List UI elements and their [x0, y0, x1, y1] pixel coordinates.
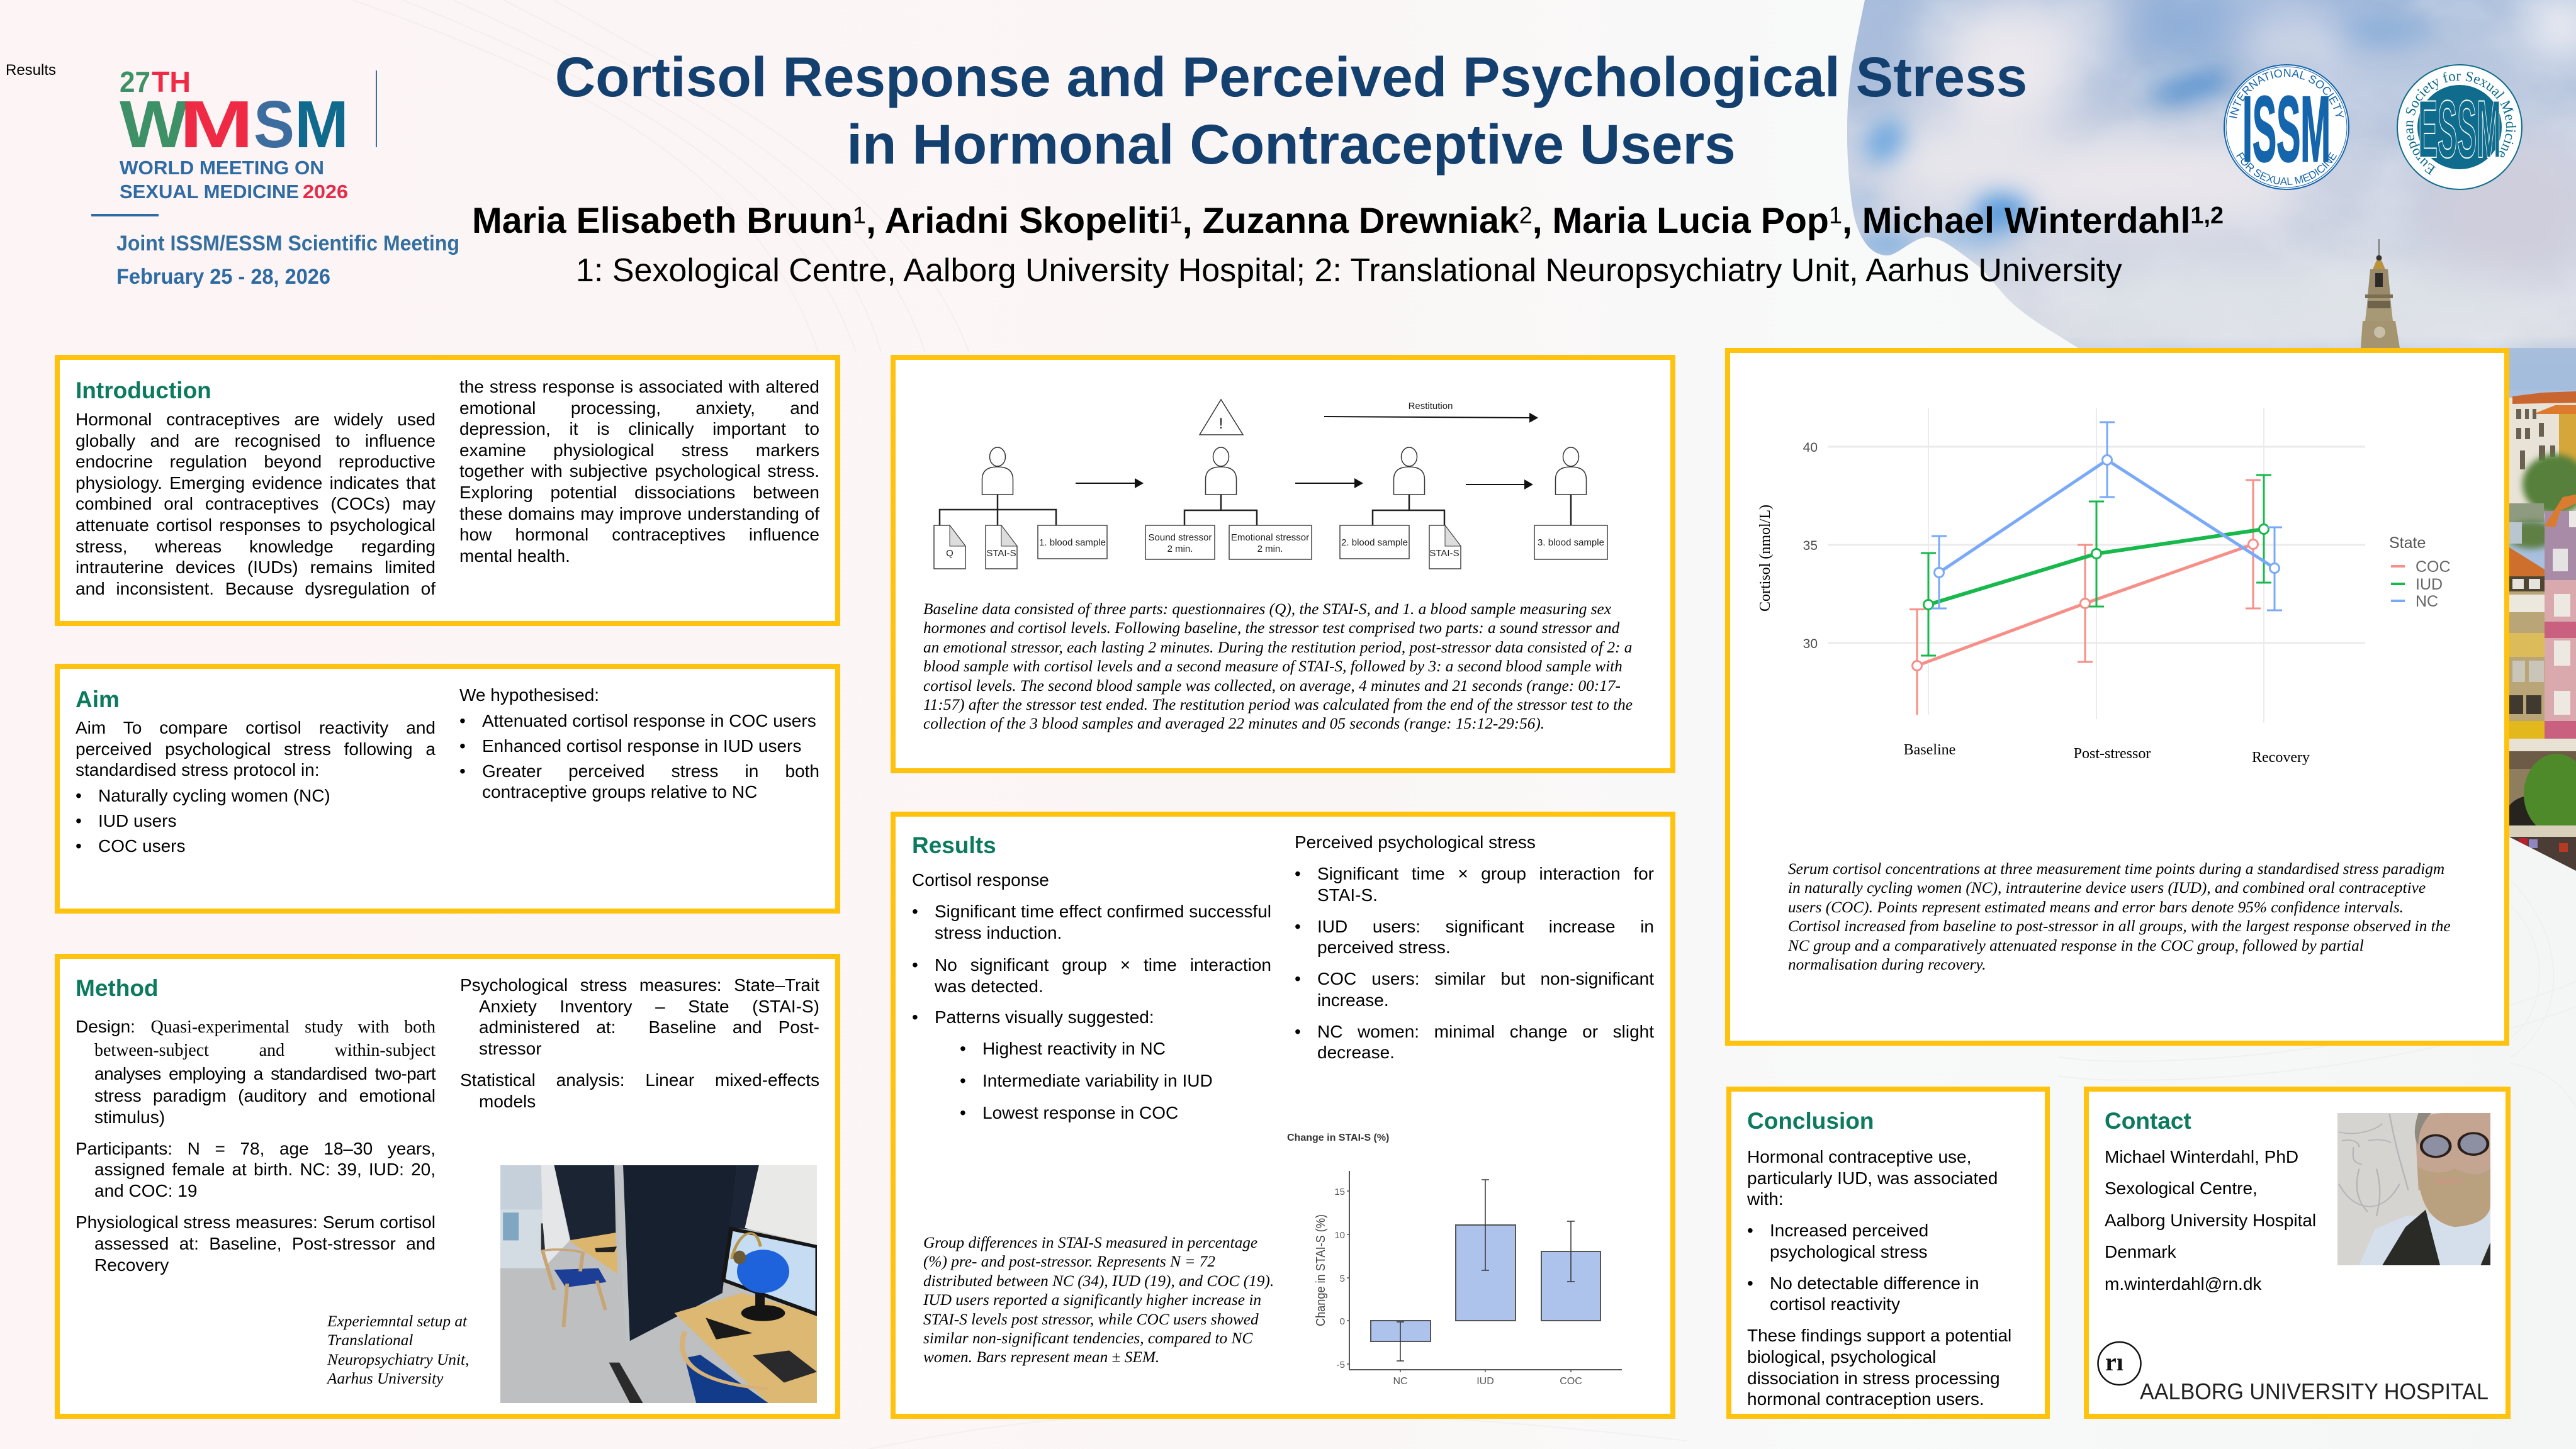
text: conclusion: hormonal contraception users.: [1747, 1389, 1984, 1409]
heading: introduction: Introduction: [76, 378, 211, 403]
text: contact details: Denmark: [2105, 1242, 2176, 1262]
photo: portrait of Michael Winterdahl: [2337, 1113, 2490, 1265]
caption: STAI-S bar chart: STAI-S levels post stressor, while COC users showed: [923, 1311, 1259, 1328]
text: conclusion: Increased perceived: [1770, 1221, 1928, 1240]
text: perceived stress findings: STAI-S.: [1317, 885, 1378, 905]
caption: study design: an emotional stressor, each lasting 2 minutes. During the restitution period, post-stressor data consisted of 2: a: [923, 639, 1632, 656]
text: introduction left column: and inconsistent. Because dysregulation of: [76, 579, 436, 598]
diagram: stress paradigm timeline: 1. blood sample: [1039, 537, 1106, 548]
line chart: cortisol across time points: Post-stressor: [2074, 746, 2151, 762]
text: aim left column: perceived psychological stress following a: [76, 739, 436, 759]
text: introduction right column: these domains may improve understanding of: [459, 504, 819, 523]
text: conclusion: particularly IUD, was associated: [1747, 1168, 1998, 1188]
text: contact details: Aalborg University Hospital: [2105, 1211, 2316, 1230]
text: aim left column: •: [76, 811, 82, 831]
text: introduction right column: the stress response is associated with altered: [459, 377, 819, 396]
bar chart: change in STAI-S: 15: [1334, 1187, 1345, 1197]
text: method left column: assessed at: Baseline, Post-stressor and: [94, 1234, 436, 1253]
text: contact details: Michael Winterdahl, PhD: [2105, 1147, 2298, 1166]
line chart: cortisol across time points: Baseline: [1904, 742, 1955, 758]
text: aim left column: COC users: [98, 836, 185, 856]
text: method left column: Recovery: [94, 1255, 169, 1275]
text: perceived stress findings: •: [1295, 1022, 1301, 1041]
text: cortisol response findings: Significant time effect confirmed successful: [935, 902, 1271, 921]
caption: cortisol chart: users (COC). Points represent estimated means and error bars denote 95% confidence intervals.: [1788, 898, 2404, 916]
conference logo: 27th WMSM: W: [120, 87, 188, 162]
diagram: stress paradigm timeline: STAI-S: [1429, 548, 1460, 559]
caption: experimental setup: [326, 1312, 469, 1387]
logo: ISSM: [2224, 64, 2523, 190]
panel: aim: [55, 664, 840, 914]
text: contact details: m.winterdahl@rn.dk: [2105, 1274, 2261, 1294]
text: method left column: analyses employing a standardised two-part: [94, 1064, 436, 1083]
bar chart: change in STAI-S: Change in STAI-S (%): [1314, 1214, 1328, 1326]
diagram: stress paradigm timeline: 3. blood sample: [1538, 537, 1604, 548]
series: IUD: [1921, 475, 2271, 656]
text: introduction left column: endocrine regulation beyond reproductive: [76, 452, 436, 471]
text: contact details: [2105, 1141, 2325, 1300]
text: contact details: Sexological Centre,: [2105, 1178, 2258, 1198]
conference logo: 27th WMSM: Joint ISSM/ESSM Scientific Meeting: [116, 232, 459, 255]
text: method right column: [460, 975, 819, 1111]
text: hypotheses: Enhanced cortisol response in IUD users: [482, 736, 801, 756]
text: conclusion: with:: [1747, 1189, 1784, 1209]
bell tower: [2361, 239, 2400, 348]
bar chart: change in STAI-S: IUD: [1476, 1376, 1494, 1387]
diagram: stress paradigm timeline: Q: [946, 548, 953, 559]
legend: State: [2389, 534, 2426, 552]
text: introduction right column: how hormonal contraceptives influence: [459, 525, 819, 544]
text: conclusion: cortisol reactivity: [1770, 1294, 1900, 1314]
line chart: cortisol across time points: Cortisol (nmol/L): [1757, 505, 1774, 612]
diagram: stress paradigm timeline: STAI-S: [986, 548, 1016, 559]
bar chart: change in STAI-S: NC: [1393, 1376, 1408, 1387]
text: aim left column: [76, 718, 436, 856]
text: conclusion: These findings support a potential: [1747, 1326, 2011, 1345]
text: introduction left column: globally and are recognised to influence: [76, 431, 436, 450]
caption: STAI-S bar chart: [923, 1233, 1282, 1367]
heading: method: Method: [76, 975, 159, 1001]
text: method left column: stimulus): [94, 1107, 165, 1127]
legend: NC: [2416, 593, 2438, 610]
diagram: stress paradigm timeline: Restitution: [1409, 401, 1453, 411]
conference logo: 27th WMSM: SEXUAL MEDICINE: [120, 181, 299, 203]
conference logo: 27th WMSM: 2026: [303, 181, 348, 203]
text: method left column: stress paradigm (auditory and emotional: [94, 1086, 436, 1105]
text: introduction right column: depression, it is clinically important to: [459, 419, 819, 439]
text: cortisol response findings: [912, 870, 1271, 1122]
conference logo: 27th WMSM: S: [254, 87, 295, 162]
heading: conclusion: Conclusion: [1747, 1108, 1874, 1134]
caption: STAI-S bar chart: similar non-significant tendencies, compared to NC: [923, 1329, 1252, 1347]
text: perceived stress findings: perceived stress.: [1317, 937, 1451, 957]
text: method left column: assigned female at birth. NC: 39, IUD: 20,: [94, 1160, 436, 1179]
heading: aim: Aim: [76, 686, 120, 712]
text: cortisol response findings: Highest reactivity in NC: [982, 1039, 1166, 1058]
conference logo: 27th WMSM: 27: [120, 65, 150, 98]
diagram: stress paradigm timeline: [933, 399, 1608, 569]
text: conclusion: biological, psychological: [1747, 1347, 1936, 1367]
text: introduction right column: emotional processing, anxiety, and: [459, 398, 819, 418]
text: method left column: Participants: N = 78, age 18–30 years,: [76, 1139, 436, 1158]
text: introduction right column: together with subjective psychological stress.: [459, 461, 819, 481]
caption: STAI-S bar chart: women. Bars represent mean ± SEM.: [923, 1348, 1159, 1366]
panel: introduction: [55, 355, 840, 626]
bar chart: change in STAI-S: Change in STAI-S (%): [1287, 1133, 1389, 1143]
diagram: stress paradigm timeline: Sound stressor: [1149, 532, 1212, 543]
caption: experimental setup: Aarhus University: [327, 1370, 443, 1387]
text: hypotheses: Greater perceived stress in both: [482, 761, 819, 781]
title: [555, 45, 2027, 176]
caption: experimental setup: Neuropsychiatry Unit,: [327, 1351, 469, 1368]
city buildings strip: [2504, 391, 2576, 875]
text: perceived stress findings: •: [1295, 864, 1301, 883]
text: cortisol response findings: stress induction.: [935, 923, 1062, 943]
text: perceived stress findings: increase.: [1317, 990, 1389, 1010]
logo: Aalborg University Hospital: rı: [2105, 1348, 2123, 1376]
caption: cortisol chart: Serum cortisol concentrations at three measurement time points during a standardised stress paradigm: [1788, 860, 2444, 878]
text: introduction left column: physiology. Emerging evidence indicates that: [76, 473, 436, 493]
diagram: stress paradigm timeline: Emotional stressor: [1231, 532, 1309, 543]
heading: results: Results: [912, 832, 996, 858]
text: hypotheses: •: [459, 736, 466, 756]
text: introduction right column: mental health.: [459, 546, 570, 566]
text: method right column: models: [479, 1092, 536, 1111]
text: introduction left column: [76, 410, 436, 598]
caption: STAI-S bar chart: (%) pre- and post-stressor. Represents N = 72: [923, 1253, 1215, 1270]
caption: cortisol chart: normalisation during recovery.: [1788, 956, 1986, 973]
caption: STAI-S bar chart: IUD users reported a significantly higher increase in: [923, 1291, 1261, 1309]
panel: conclusion: [1726, 1087, 2050, 1419]
text: cortisol response findings: was detected.: [935, 976, 1043, 996]
conference logo: 27th WMSM: M: [179, 87, 254, 162]
text: perceived stress findings: [1295, 832, 1654, 1062]
bar chart: change in STAI-S: -5: [1337, 1360, 1345, 1370]
diagram: stress paradigm timeline: 2. blood sample: [1341, 537, 1408, 548]
line chart: cortisol across time points: [1750, 403, 2467, 768]
text: cortisol response findings: •: [960, 1103, 966, 1122]
text: method left column: Design: Quasi-experimental study with both: [76, 1017, 436, 1037]
title: in Hormonal Contraceptive Users: [846, 113, 1736, 176]
text: conclusion: [1747, 1146, 2030, 1411]
caption: cortisol chart: NC group and a comparatively attenuated response in the COC group, followed by partial: [1788, 937, 2364, 954]
text: cortisol response findings: Cortisol response: [912, 870, 1049, 890]
caption: study design: Baseline data consisted of three parts: questionnaires (Q), the STAI-S, and 1. a blood sample measuring sex: [923, 600, 1611, 618]
text: cortisol response findings: Intermediate variability in IUD: [982, 1071, 1213, 1090]
caption: study design: cortisol levels. The second blood sample was collected, on average, 4 minutes and 21 seconds (range: 00:17-: [923, 677, 1621, 695]
text: hypotheses: Attenuated cortisol response in COC users: [482, 711, 816, 730]
text: introduction right column: [459, 377, 819, 566]
text: introduction right column: Exploring potential dissociations between: [459, 483, 819, 502]
text: hypotheses: •: [459, 761, 466, 781]
logo: Aalborg University Hospital: [2093, 1337, 2495, 1406]
legend: IUD: [2416, 576, 2443, 593]
line chart: cortisol across time points: 30: [1803, 637, 1818, 651]
text: conclusion: No detectable difference in: [1770, 1273, 1979, 1293]
text: aim left column: Naturally cycling women (NC): [98, 786, 330, 805]
text: introduction right column: examine physiological stress markers: [459, 440, 819, 460]
text: cortisol response findings: •: [912, 1007, 918, 1027]
panel: study design: [891, 355, 1675, 773]
bar chart: change in STAI-S: 10: [1334, 1230, 1345, 1241]
diagram: stress paradigm timeline: !: [1219, 415, 1223, 432]
text: perceived stress findings: Perceived psychological stress: [1295, 832, 1536, 852]
caption: study design: 11:57) after the stressor test ended. The restitution period was calculated from the end of the stressor test to the: [923, 696, 1633, 713]
caption: cortisol chart: in naturally cycling women (NC), intrauterine device users (IUD), and combined oral contraceptive: [1788, 879, 2426, 897]
text: cortisol response findings: •: [912, 902, 918, 921]
text: perceived stress findings: IUD users: significant increase in: [1317, 917, 1654, 936]
line chart: cortisol across time points: 35: [1803, 539, 1818, 553]
text: perceived stress findings: •: [1295, 917, 1301, 936]
affiliations: 1: Sexological Centre, Aalborg University Hospital; 2: Translational Neuropsychiatry Unit, Aarhus University: [576, 252, 2122, 289]
text: perceived stress findings: COC users: similar but non-significant: [1317, 969, 1654, 988]
text: perceived stress findings: decrease.: [1317, 1043, 1395, 1062]
text: perceived stress findings: Significant time × group interaction for: [1317, 864, 1654, 883]
logo: ISSM: INTERNATIONAL SOCIETY: [2229, 69, 2344, 118]
text: hypotheses: We hypothesised:: [459, 685, 599, 705]
text: cortisol response findings: •: [960, 1039, 966, 1058]
conference logo: 27th WMSM: M: [295, 87, 349, 162]
caption: study design: [923, 600, 1633, 732]
text: cortisol response findings: Patterns visually suggested:: [935, 1007, 1154, 1027]
text: aim left column: IUD users: [98, 811, 176, 831]
text: method right column: stressor: [479, 1039, 542, 1058]
caption: study design: blood sample with cortisol levels and a second measure of STAI-S, followed by 3: a second blood sample with: [923, 657, 1623, 675]
text: conclusion: •: [1747, 1273, 1753, 1293]
caption: cortisol chart: Cortisol increased from baseline to post-stressor in all groups, with the largest response observed in the: [1788, 917, 2451, 935]
bar chart: change in STAI-S: 5: [1340, 1273, 1345, 1284]
text: hypotheses: contraceptive groups relative to NC: [482, 782, 757, 802]
text: perceived stress findings: •: [1295, 969, 1301, 988]
text: introduction left column: combined oral contraceptives (COCs) may: [76, 494, 436, 513]
panel: method: [55, 954, 840, 1419]
text: cortisol response findings: Lowest response in COC: [982, 1103, 1178, 1122]
legend: [2389, 534, 2451, 610]
logo: ISSM: FOR SEXUAL MEDICINE: [2236, 152, 2337, 185]
text: hypotheses: [459, 685, 819, 802]
text: conclusion: •: [1747, 1221, 1753, 1240]
line chart: cortisol across time points: 40: [1803, 440, 1818, 455]
text: method left column: [76, 1017, 436, 1275]
text: aim left column: •: [76, 836, 82, 856]
conference logo: 27th WMSM: WORLD MEETING ON: [120, 157, 324, 179]
logo: ESSM: [2224, 64, 2523, 190]
text: conclusion: Hormonal contraceptive use,: [1747, 1147, 1971, 1166]
legend: COC: [2416, 558, 2451, 576]
text: aim left column: Aim To compare cortisol reactivity and: [76, 718, 436, 737]
caption: study design: hormones and cortisol levels. Following baseline, the stressor test comprised two parts: a sound stressor and: [923, 619, 1619, 637]
text: introduction left column: Hormonal contraceptives are widely used: [76, 410, 436, 429]
text: method left column: between-subject and within-subject: [94, 1041, 436, 1060]
heading: contact: Contact: [2105, 1108, 2191, 1134]
text: cortisol response findings: •: [912, 955, 918, 975]
text: aim left column: standardised stress protocol in:: [76, 760, 320, 780]
line chart: cortisol across time points: Recovery: [2252, 749, 2310, 766]
text: method right column: Statistical analysis: Linear mixed-effects: [460, 1070, 819, 1090]
caption: study design: collection of the 3 blood samples and averaged 22 minutes and 05 seconds (range: 15:12-29:56).: [923, 715, 1544, 732]
conference logo: 27th WMSM: TH: [152, 65, 191, 98]
text: aim left column: •: [76, 786, 82, 805]
text: method right column: Psychological stress measures: State–Trait: [460, 975, 819, 995]
bar chart: change in STAI-S: COC: [1560, 1376, 1582, 1387]
conference logo: 27th WMSM: [91, 65, 459, 289]
panel: cortisol chart: [1725, 348, 2509, 1046]
text: cortisol response findings: No significant group × time interaction: [935, 955, 1271, 975]
text: method left column: and COC: 19: [94, 1181, 197, 1200]
text: introduction left column: stress, whereas knowledge regarding: [76, 537, 436, 556]
caption: STAI-S bar chart: Group differences in STAI-S measured in percentage: [923, 1234, 1257, 1251]
title: Cortisol Response and Perceived Psychological Stress: [555, 45, 2027, 108]
panel: results: [891, 812, 1675, 1419]
text: method right column: administered at: Baseline and Post-: [479, 1017, 819, 1037]
caption: experimental setup: Experiemntal setup at: [327, 1312, 467, 1330]
bar chart: change in STAI-S: 0: [1340, 1316, 1345, 1327]
conference logo: 27th WMSM: February 25 - 28, 2026: [116, 265, 330, 289]
series: NC: [1932, 422, 2282, 610]
diagram: stress paradigm timeline: 2 min.: [1167, 544, 1193, 554]
text: method right column: Anxiety Inventory – State (STAI-S): [479, 997, 819, 1016]
panel: contact: [2084, 1087, 2511, 1419]
text: perceived stress findings: NC women: minimal change or slight: [1317, 1022, 1654, 1041]
text: method left column: Physiological stress measures: Serum cortisol: [76, 1212, 436, 1232]
logo: ESSM: European Society for Sexual Medicine: [2405, 72, 2516, 175]
text: introduction left column: attenuate cortisol responses to psychological: [76, 515, 436, 535]
diagram: stress paradigm timeline: 2 min.: [1257, 544, 1283, 554]
stray label: Results: Results: [6, 62, 56, 79]
authors: Maria Elisabeth Bruun1, Ariadni Skopeliti1, Zuzanna Drewniak2, Maria Lucia Pop1, Michael Winterdahl1,2: [472, 201, 2224, 241]
series: COC: [1910, 480, 2261, 715]
caption: STAI-S bar chart: distributed between NC (34), IUD (19), and COC (19).: [923, 1272, 1274, 1290]
text: conclusion: psychological stress: [1770, 1242, 1928, 1262]
photo: laboratory setup: [500, 1165, 817, 1403]
text: conclusion: dissociation in stress processing: [1747, 1368, 2000, 1388]
text: hypotheses: •: [459, 711, 466, 730]
caption: cortisol chart: [1788, 859, 2465, 975]
text: cortisol response findings: •: [960, 1071, 966, 1090]
text: introduction left column: intrauterine devices (IUDs) remains limited: [76, 557, 436, 577]
caption: experimental setup: Translational: [327, 1331, 413, 1349]
bar chart: change in STAI-S: [1281, 1126, 1627, 1390]
